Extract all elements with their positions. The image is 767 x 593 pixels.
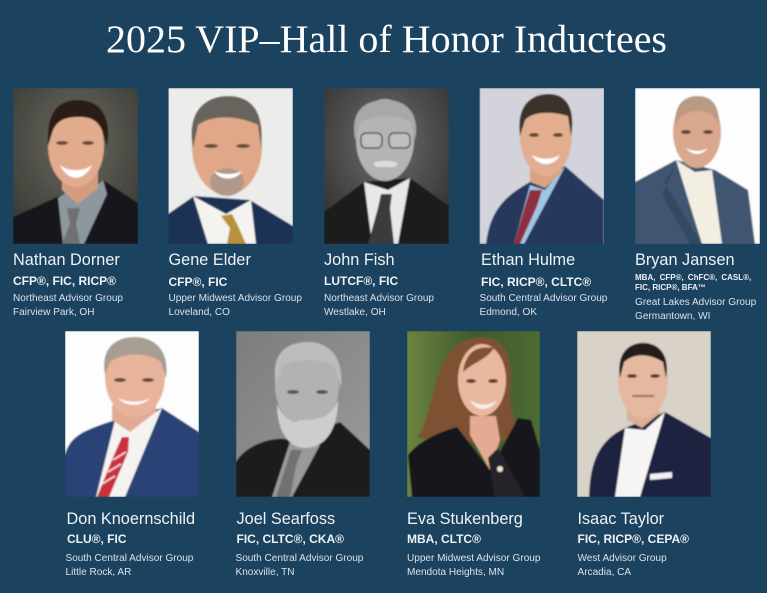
advisor group and city: South Central Advisor Group [236, 553, 364, 564]
credentials: CLU®, FIC [67, 532, 127, 546]
advisor group and city: Upper Midwest Advisor Group [407, 553, 541, 564]
photo: Bryan Jansen [635, 88, 760, 244]
advisor group and city: Westlake, OH [324, 307, 386, 318]
photo: Eva Stukenberg [407, 331, 540, 497]
name: Gene Elder [168, 251, 251, 269]
inductee: Joel Searfoss [236, 331, 370, 578]
advisor group and city: Upper Midwest Advisor Group [168, 293, 302, 304]
name: Nathan Dorner [13, 251, 120, 269]
name: Don Knoernschild [66, 510, 195, 528]
name: Eva Stukenberg [407, 510, 523, 528]
inductee: Isaac Taylor [577, 331, 711, 578]
advisor group and city: Germantown, WI [635, 311, 710, 322]
photo: Gene Elder [168, 88, 293, 244]
name: Bryan Jansen [635, 251, 735, 269]
photo: Isaac Taylor [577, 331, 711, 497]
inductee: John Fish [324, 88, 449, 318]
advisor group and city: South Central Advisor Group [66, 553, 194, 564]
name: Joel Searfoss [236, 510, 335, 528]
credentials: LUTCF®, FIC [324, 274, 398, 288]
inductee: Bryan Jansen [635, 88, 760, 322]
advisor group and city: Loveland, CO [168, 307, 230, 318]
credentials: MBA, CLTC® [407, 532, 481, 546]
inductee: Gene Elder [168, 88, 302, 318]
photo: John Fish [324, 88, 449, 244]
credentials: FIC, RICP®, CLTC® [481, 275, 591, 289]
advisor group and city: Knoxville, TN [236, 567, 295, 578]
photo: Nathan Dorner [13, 88, 138, 244]
advisor group and city: Edmond, OK [480, 307, 537, 318]
credentials: FIC, CLTC®, CKA® [236, 532, 344, 546]
credentials: CFP®, FIC, RICP® [13, 274, 116, 288]
credentials: FIC, RICP®, BFA™ [635, 283, 706, 292]
inductee: Ethan Hulme [480, 88, 608, 318]
inductee: Don Knoernschild [65, 331, 199, 578]
credentials: CFP®, FIC [168, 275, 228, 289]
advisor group and city: Arcadia, CA [578, 567, 631, 578]
photo: Joel Searfoss [236, 331, 370, 497]
photo: Ethan Hulme [480, 88, 604, 244]
title: 2025 VIP–Hall of Honor Inductees [106, 18, 667, 61]
credentials: FIC, RICP®, CEPA® [578, 532, 689, 546]
advisor group and city: West Advisor Group [578, 553, 667, 564]
name: Ethan Hulme [481, 251, 575, 269]
advisor group and city: Northeast Advisor Group [13, 293, 123, 304]
name: John Fish [324, 251, 395, 269]
inductee: Eva Stukenberg [407, 331, 541, 578]
advisor group and city: South Central Advisor Group [480, 293, 608, 304]
advisor group and city: Fairview Park, OH [13, 307, 95, 318]
advisor group and city: Northeast Advisor Group [324, 293, 434, 304]
name: Isaac Taylor [578, 510, 665, 528]
photo: Don Knoernschild [65, 331, 199, 497]
advisor group and city: Great Lakes Advisor Group [635, 297, 757, 308]
inductee: Nathan Dorner [13, 88, 138, 318]
credentials: MBA, CFP®, ChFC®, CASL®, [635, 273, 751, 282]
advisor group and city: Little Rock, AR [66, 567, 131, 578]
advisor group and city: Mendota Heights, MN [407, 567, 504, 578]
